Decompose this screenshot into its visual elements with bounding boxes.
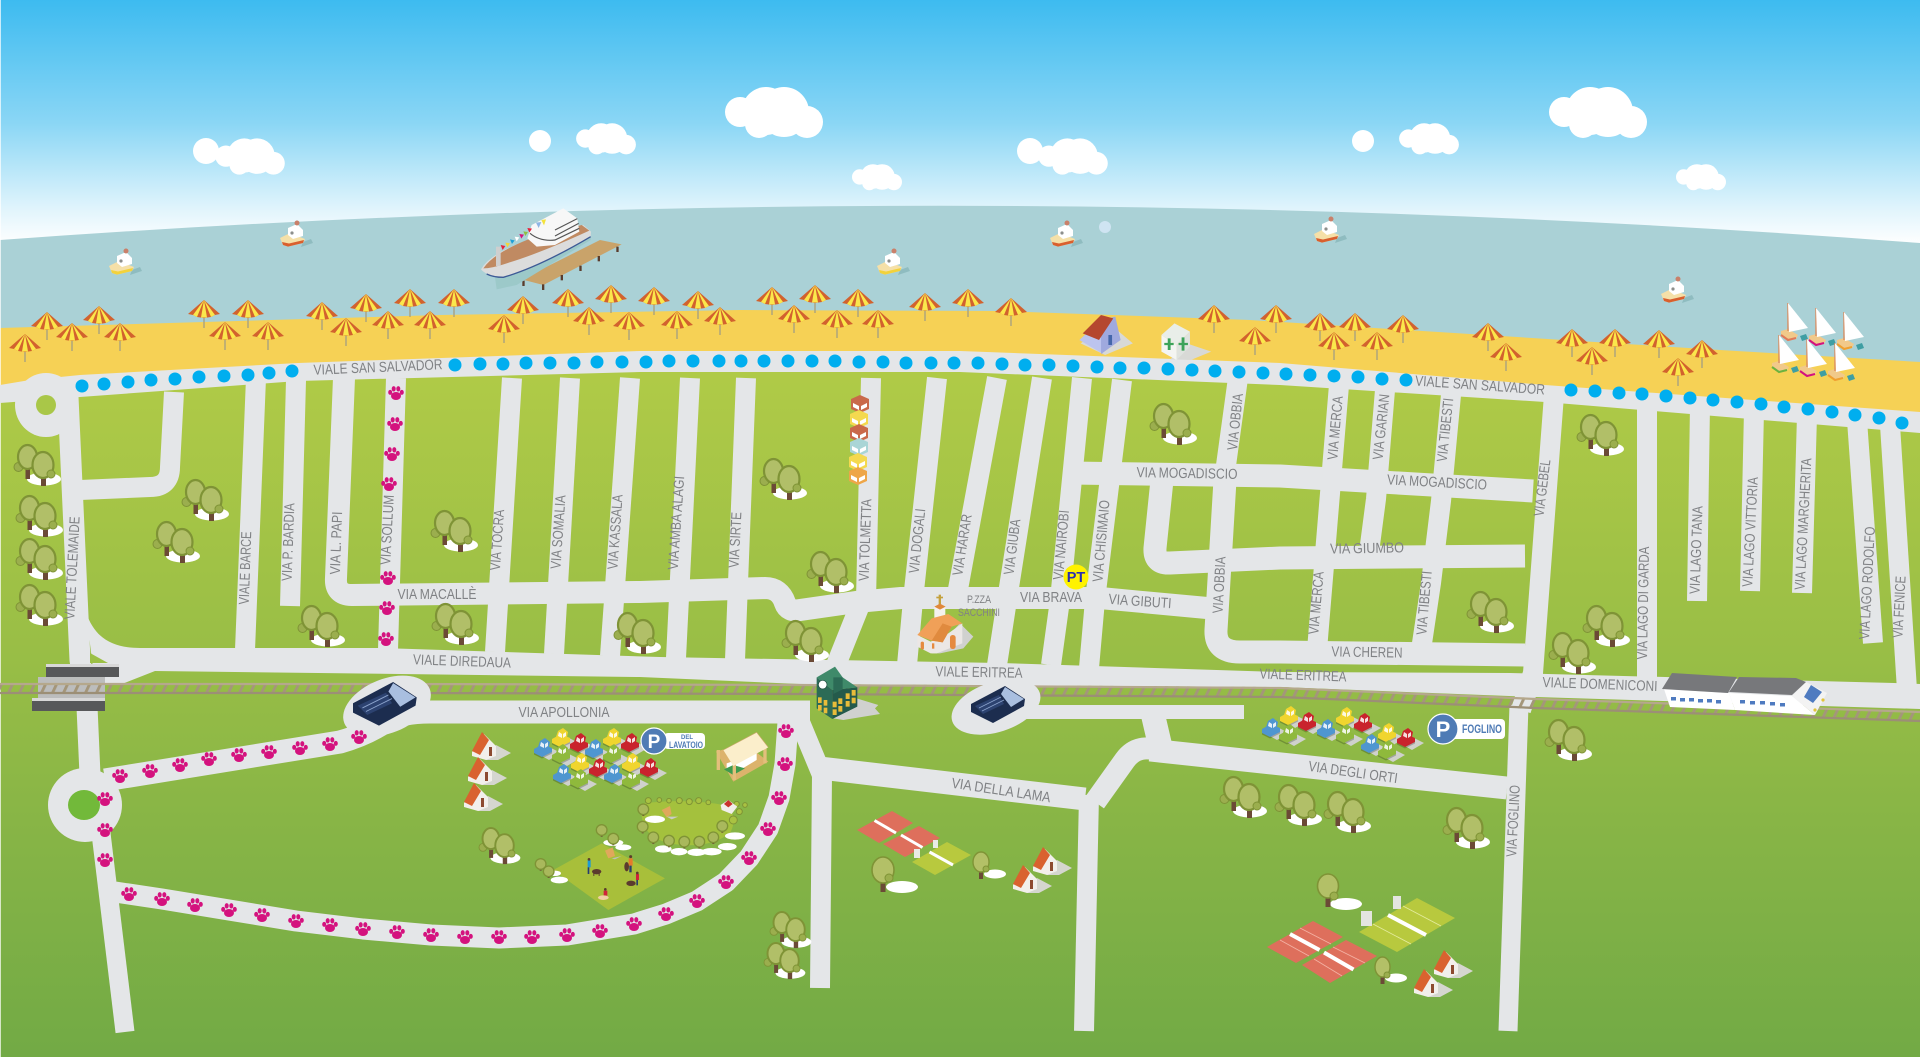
hospital: [1161, 323, 1211, 360]
parking sign del lavatoio: LAVATOIO: [669, 740, 703, 751]
label: via nairobi: VIA NAIROBI: [1051, 509, 1073, 581]
beach house: [1079, 315, 1133, 355]
label: piazza sacchini: P.ZZA: [967, 594, 992, 606]
land: [0, 361, 1920, 1057]
pink paw trail: [97, 386, 794, 944]
label: via amba alagi: VIA AMBA ALAGI: [666, 476, 688, 570]
tennis courts south east: [1267, 896, 1455, 983]
garden white ground patches: [645, 816, 745, 856]
label: via lago vittoria: VIA LAGO VITTORIA: [1740, 476, 1762, 587]
pier: [522, 240, 622, 290]
parking lavatoio cars: [534, 728, 667, 791]
small yachts: [109, 216, 1694, 303]
field trees: [535, 825, 631, 883]
label: via tolmetta: VIA TOLMETTA: [857, 498, 875, 581]
road network: [0, 351, 1920, 1032]
tennis courts south west: [857, 811, 971, 875]
label: via tocra: VIA TOCRA: [488, 509, 508, 571]
road: viale san salvador: [0, 351, 1920, 433]
label: via obbia north: VIA OBBIA: [1225, 393, 1247, 451]
main road diredaua eritrea domeniconi: [86, 612, 1920, 709]
side streets: [68, 378, 1907, 1032]
garden trees: [637, 804, 728, 848]
label: via sollum: VIA SOLLUM: [378, 495, 398, 565]
label: via harar: VIA HARAR: [950, 513, 976, 577]
label: via mogadiscio west: VIA MOGADISCIO: [1136, 465, 1238, 483]
parking sign del lavatoio: P: [648, 732, 661, 753]
label: via sirte: VIA SIRTE: [727, 511, 745, 568]
label: viale diredaua: VIALE DIREDAUA: [413, 652, 512, 672]
underpass east: [945, 669, 1047, 745]
garden hedge bushes: [645, 798, 747, 824]
label: via apollonia: VIA APOLLONIA: [518, 705, 610, 721]
label: via della lama: VIA DELLA LAMA: [950, 776, 1052, 806]
roundabout bottom: [48, 768, 122, 842]
post office marker: [1064, 564, 1088, 590]
station ground between platforms: [38, 677, 105, 701]
roundabout top green centre: [36, 395, 56, 415]
label: viale barce: VIALE BARCE: [237, 531, 255, 605]
label: via brava: VIA BRAVA: [1020, 590, 1082, 606]
label: piazza sacchini: SACCHINI: [958, 607, 1000, 619]
label: via mogadiscio east: VIA MOGADISCIO: [1387, 472, 1487, 494]
parking sign del lavatoio: DEL: [681, 735, 693, 741]
label: via macalle: VIA MACALLÈ: [398, 586, 477, 603]
cottages: [464, 732, 1473, 997]
roundabout top: [15, 373, 77, 437]
field bench: [605, 847, 622, 859]
roundabout bottom green centre: [68, 790, 100, 820]
label: via lago tana: VIA LAGO TANA: [1687, 505, 1707, 594]
green wedge: [90, 653, 108, 663]
label: via kassala: VIA KASSALA: [605, 494, 627, 570]
label: via dogali: VIA DOGALI: [907, 508, 929, 574]
garden bench: [662, 806, 678, 819]
label: via fenice: VIA FENICE: [1890, 575, 1910, 638]
label: via somalia: VIA SOMALIA: [548, 494, 570, 569]
label: viale domeniconi: VIALE DOMENICONI: [1542, 675, 1658, 695]
picnic pavilion: [716, 732, 768, 782]
label: viale eritrea west: VIALE ERITREA: [935, 664, 1023, 682]
parking sign foglino: P: [1436, 717, 1450, 742]
label: piazza sacchini: [958, 594, 1000, 619]
clouds: [193, 87, 1726, 190]
people with dogs: [588, 855, 639, 900]
street name labels: [62, 357, 1910, 857]
beach umbrellas: [9, 285, 1718, 386]
label: viale tolemaide: VIALE TOLEMAIDE: [62, 516, 84, 620]
parking foglino cars: [1262, 706, 1424, 762]
post office marker: PT: [1067, 570, 1085, 586]
label: via l. papi: VIA L. PAPI: [328, 511, 346, 575]
parking sign foglino: [1428, 714, 1505, 744]
label: via giuba: VIA GIUBA: [1002, 518, 1024, 576]
garden kiosk: [721, 800, 737, 814]
label: viale san salvador east: VIALE SAN SALVADOR: [1415, 373, 1545, 399]
label: via lago di garda: VIA LAGO DI GARDA: [1635, 546, 1653, 660]
label: via p. bardia: VIA P. BARDIA: [280, 502, 298, 581]
label: via lago margherita: VIA LAGO MARGHERITA: [1793, 457, 1815, 590]
label: via giumbo: VIA GIUMBO: [1330, 540, 1404, 558]
single trees by courts: [872, 852, 1407, 984]
sailboats: [1772, 303, 1864, 381]
label: via garian: VIA GARIAN: [1371, 393, 1393, 461]
railway: [0, 683, 1920, 722]
label: via obbia south: VIA OBBIA: [1211, 556, 1229, 614]
label: via gebel: VIA GEBEL: [1532, 459, 1554, 517]
sky background: [0, 0, 1920, 245]
trees: [14, 404, 1630, 979]
label: via degli orti: VIA DEGLI ORTI: [1307, 759, 1399, 787]
train: [1662, 673, 1827, 715]
label: via merca north: VIA MERCA: [1325, 395, 1347, 461]
parking sign foglino: FOGLINO: [1462, 722, 1502, 736]
blue dots seaside path: [76, 354, 1908, 430]
label: via chisimaio: VIA CHISIMAIO: [1090, 499, 1114, 583]
pale buoy: [1099, 221, 1111, 233]
church: [917, 595, 973, 653]
label: via merca south: VIA MERCA: [1306, 571, 1328, 635]
label: via gibuti: VIA GIBUTI: [1108, 592, 1172, 612]
dog field: [553, 843, 665, 910]
label: via cheren: VIA CHEREN: [1331, 644, 1403, 662]
label: via foglino: VIA FOGLINO: [1504, 785, 1524, 857]
town hall clock tower: [817, 667, 880, 720]
cruise ship: [481, 208, 591, 289]
label: viale san salvador west: VIALE SAN SALVADOR: [313, 357, 443, 379]
dog park garden and field: [535, 798, 747, 910]
parking sign del lavatoio: [641, 728, 705, 754]
toy block houses: [849, 395, 869, 485]
underpass west: [334, 664, 440, 748]
label: viale eritrea east: VIALE ERITREA: [1259, 666, 1347, 686]
label: via tibesti north: VIA TIBESTI: [1435, 397, 1457, 463]
left edge line: [0, 0, 1, 1057]
label: via tibesti south: VIA TIBESTI: [1414, 570, 1436, 636]
station platforms: [32, 664, 119, 711]
sea: [0, 206, 1920, 380]
beach: [0, 310, 1920, 440]
label: via lago rodolfo: VIA LAGO RODOLFO: [1857, 526, 1879, 640]
garden lawn: [642, 801, 734, 845]
